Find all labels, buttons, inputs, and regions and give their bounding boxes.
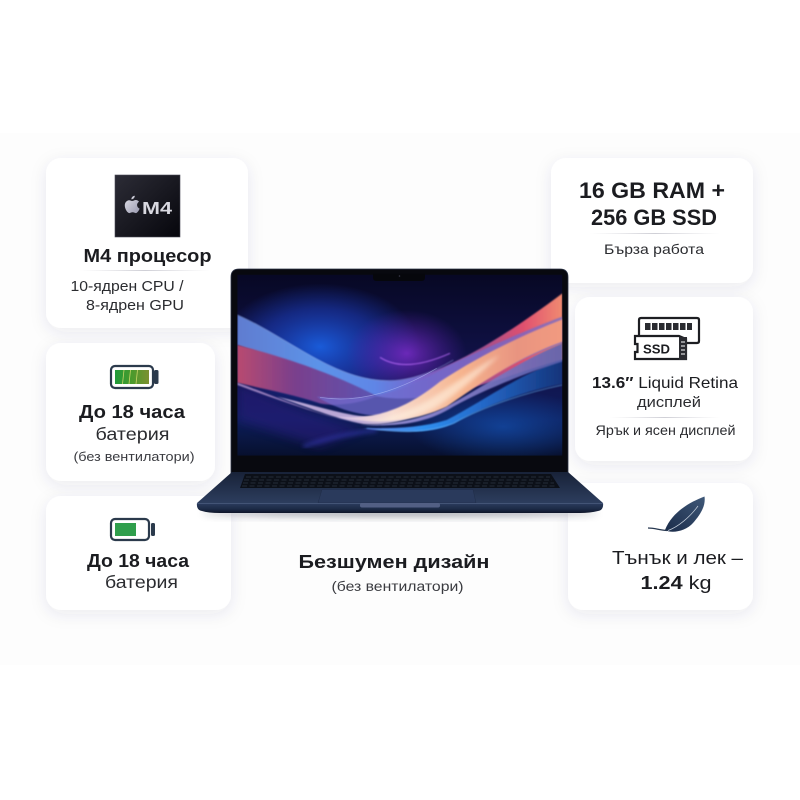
text: дисплей: дисплей bbox=[637, 394, 701, 411]
left wisp bbox=[237, 382, 342, 420]
highlights bbox=[237, 315, 453, 381]
top band bbox=[237, 293, 562, 399]
heading: memory: 256 GB SSD bbox=[591, 205, 717, 230]
left lower dark violet haze bbox=[237, 383, 363, 447]
violet sheet bbox=[360, 343, 562, 425]
laptop bbox=[197, 269, 603, 516]
icon: RAM and SSD bbox=[635, 318, 699, 360]
laptop trackpad bbox=[318, 490, 476, 503]
background panel bbox=[0, 133, 800, 665]
icon: battery bbox=[111, 519, 155, 540]
text: core counts: 10-ядрен CPU / bbox=[70, 279, 185, 295]
text: без вентилатори: (без вентилатори) bbox=[74, 449, 194, 464]
panel: battery with detail bbox=[46, 343, 215, 481]
text: silent design: Безшумен дизайн bbox=[298, 551, 490, 572]
icon: feather bbox=[648, 496, 705, 532]
panel: display bbox=[575, 297, 753, 461]
text: батерия: батерия bbox=[105, 572, 178, 592]
panel: battery bbox=[46, 496, 231, 610]
panel: RAM and SSD bbox=[551, 158, 753, 283]
lower blue sheet bbox=[363, 360, 562, 432]
pink left band bbox=[237, 345, 377, 405]
peach sheet bbox=[337, 319, 562, 421]
laptop deck bbox=[197, 472, 603, 505]
heading: До 18 часа: До 18 часа bbox=[79, 401, 186, 422]
laptop keyboard bbox=[240, 474, 560, 488]
panel: M4 processor bbox=[46, 158, 248, 328]
bright core bbox=[360, 355, 500, 422]
heading: memory bbox=[579, 178, 725, 230]
heading: До 18 часа: До 18 часа bbox=[87, 550, 190, 571]
icon: M4 chip: M4 bbox=[142, 198, 172, 218]
mid blue sheet bbox=[317, 317, 562, 416]
text: Тънък и лек: Тънък и лек – bbox=[612, 548, 743, 568]
laptop screen bbox=[237, 274, 562, 456]
text: silent design: (без вентилатори) bbox=[332, 579, 464, 594]
laptop front edge bbox=[197, 503, 603, 513]
text: батерия: батерия bbox=[96, 424, 170, 444]
icon: M4 chip bbox=[115, 175, 180, 237]
icon: full battery bbox=[111, 366, 158, 388]
text: silent design bbox=[298, 551, 490, 594]
panel: weight bbox=[568, 483, 753, 610]
text: Бърза работа: Бърза работа bbox=[604, 241, 704, 257]
heading: memory: 16 GB RAM + bbox=[579, 178, 725, 203]
laptop lid bbox=[231, 269, 568, 474]
icon: RAM and SSD: SSD bbox=[643, 342, 670, 356]
text: core counts bbox=[70, 279, 185, 314]
heading: M4 процесор: M4 процесор bbox=[84, 245, 212, 266]
text: Ярък и ясен дисплей: Ярък и ясен дисплей bbox=[596, 423, 736, 438]
heading: display size: 13.6″ Liquid Retina bbox=[592, 375, 738, 392]
text: weight value: 1.24 kg bbox=[640, 572, 712, 593]
text: core counts: 8-ядрен GPU bbox=[86, 298, 184, 314]
laptop notch bbox=[373, 274, 425, 281]
